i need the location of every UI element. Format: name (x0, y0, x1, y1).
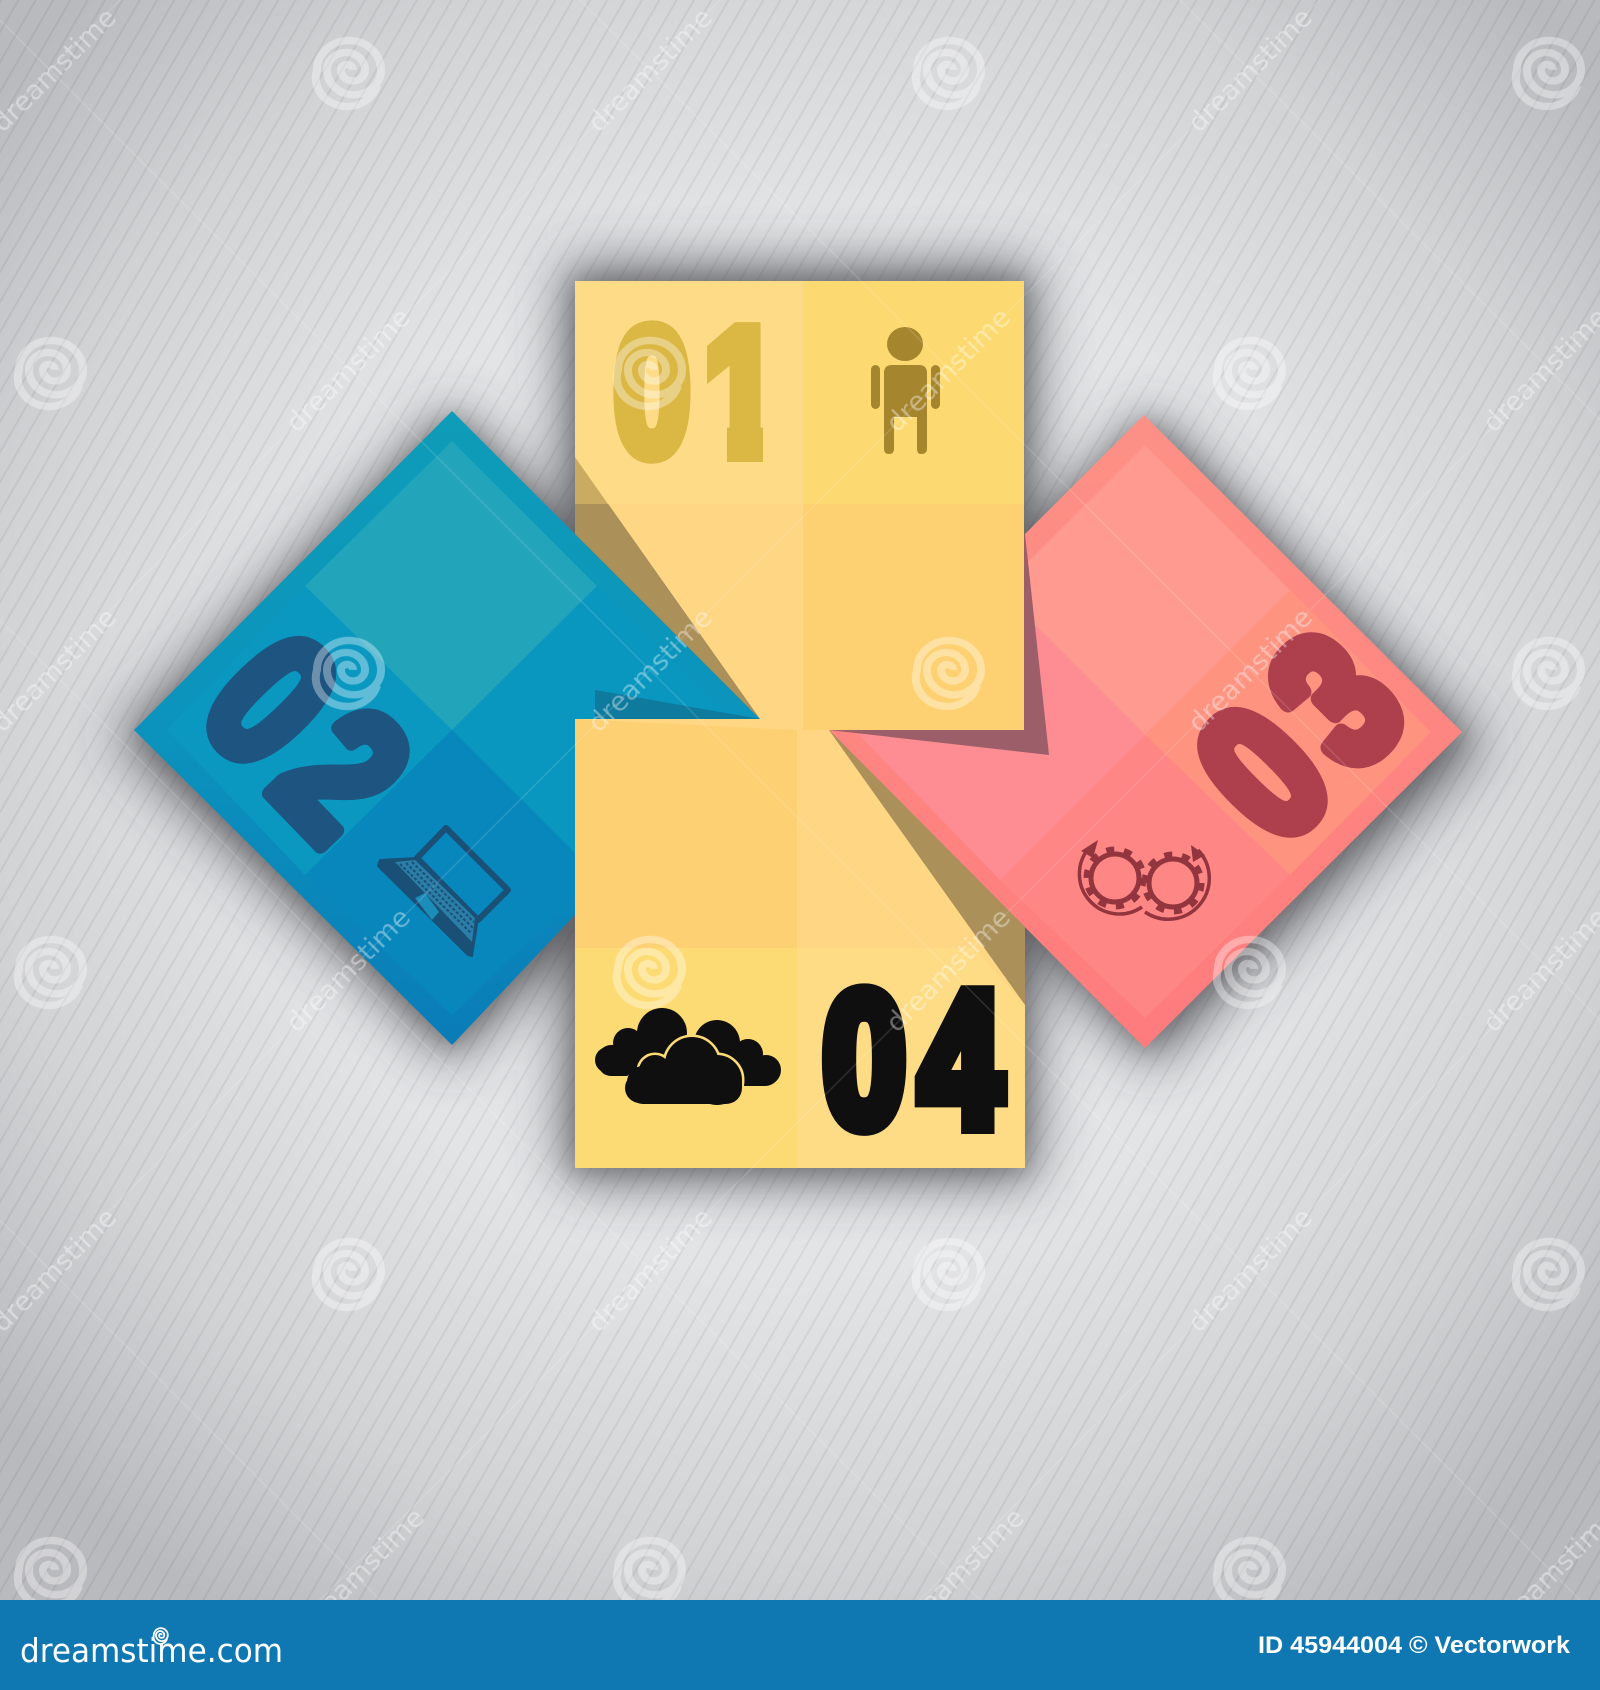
number 01: 01 (614, 291, 794, 492)
icon: gears with arrows (1079, 840, 1209, 919)
icon: brand spiral (153, 1628, 168, 1644)
number 1 foot mask (697, 424, 800, 470)
fold shadows behind yellow panel (575, 457, 1025, 1005)
number 03: 03 (1157, 582, 1453, 878)
watermark text: dreamstime (880, 302, 1017, 439)
watermark text: dreamstime (294, 1502, 431, 1639)
icon: laptop (378, 828, 508, 956)
number 02: 02 (165, 595, 461, 891)
footer banner (0, 1600, 1600, 1690)
watermark text: dreamstime (1182, 1202, 1319, 1339)
icon: person (871, 327, 940, 454)
panel: yellow 01 and 04 (575, 281, 1025, 1168)
fold shadow on pink panel (829, 534, 1049, 755)
number 04: 04 (823, 954, 1016, 1166)
watermark text: dreamstime (894, 1502, 1031, 1639)
watermark text: dreamstime (582, 2, 719, 139)
icon: clouds (595, 1008, 781, 1105)
panel shadows (116, 266, 1484, 1180)
image id and credit: ID 45944004 © Vectorwork (1258, 1632, 1571, 1659)
watermark text: dreamstime (582, 602, 719, 739)
watermark text: dreamstime (1182, 2, 1319, 139)
watermark text: dreamstime (1182, 602, 1319, 739)
watermark text: dreamstime (280, 902, 417, 1039)
watermark text: dreamstime (880, 902, 1017, 1039)
panel: 02 blue diamond (134, 411, 760, 1045)
watermark text: dreamstime (280, 302, 417, 439)
watermark text: dreamstime (582, 1202, 719, 1339)
brand logotype: dreamstime.com (20, 1631, 283, 1670)
panel: 03 pink diamond (829, 415, 1462, 1048)
